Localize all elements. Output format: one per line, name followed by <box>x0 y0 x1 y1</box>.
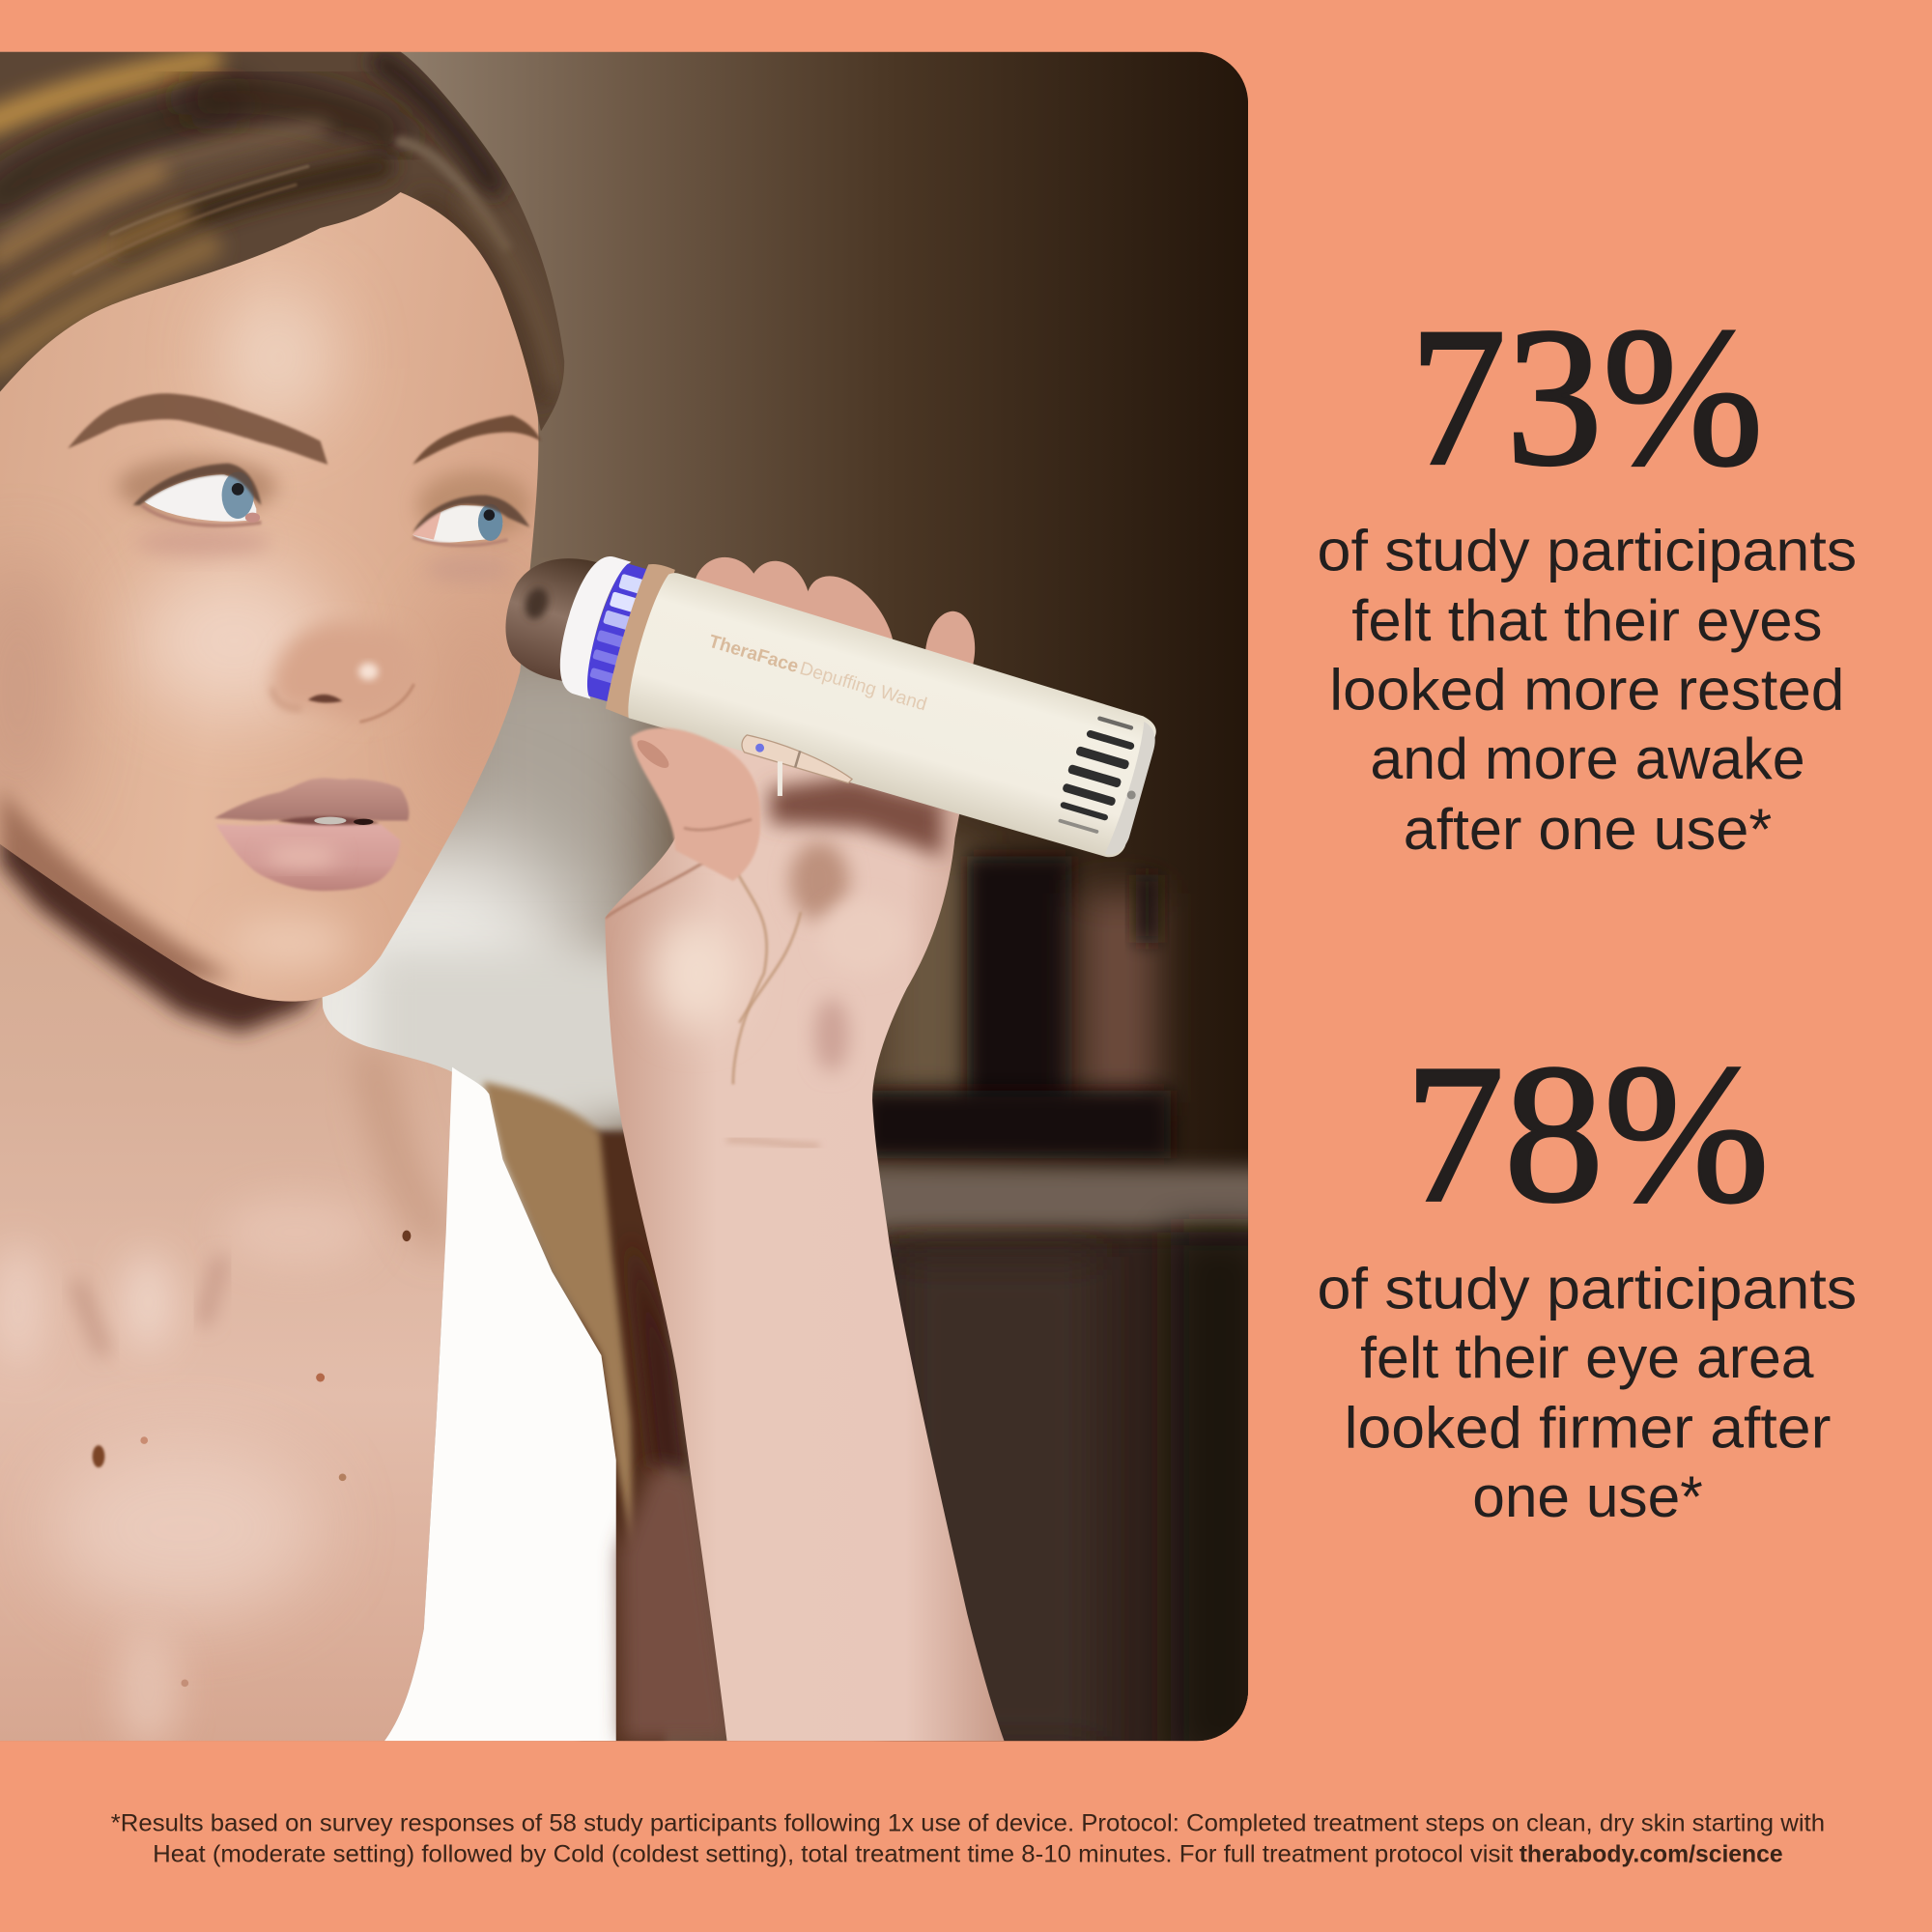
nose <box>272 622 417 722</box>
wand blue light strip <box>579 560 654 703</box>
right eye <box>412 496 529 546</box>
description: firmer eye area: looked firmer after <box>1345 1395 1831 1461</box>
heading: 78%: 78% <box>1405 1024 1770 1243</box>
description: firmer eye area <box>1318 1256 1857 1529</box>
wand end vent slots <box>1053 712 1140 837</box>
description: rested and awake: and more awake <box>1370 725 1805 791</box>
hair <box>0 52 564 431</box>
footnote: therabody.com/science <box>1520 1840 1783 1867</box>
description: firmer eye area: one use* <box>1472 1463 1703 1529</box>
description: firmer eye area: of study participants <box>1318 1256 1857 1321</box>
tan bag strap <box>483 1082 634 1552</box>
torso and neck skin <box>0 844 452 1741</box>
eye socket shading <box>117 457 277 516</box>
footnote: Heat (moderate setting) followed by Cold (coldest setting), total treatment time 8-10 minutes. For full treatment protocol visit <box>153 1840 1513 1867</box>
photo panel: woman using depuffing wand <box>0 52 1269 1762</box>
wand gold collar <box>602 560 675 719</box>
wand end cap <box>1105 722 1162 859</box>
fingers behind the wand <box>696 556 976 665</box>
wand treatment head <box>492 542 604 684</box>
wand printed label: TheraFaceDepuffing Wand <box>706 632 929 715</box>
blurred room background <box>0 52 1269 1762</box>
wand white ring <box>548 550 631 699</box>
face <box>0 173 541 1002</box>
left eye <box>133 464 261 526</box>
white tank top <box>384 1067 616 1741</box>
description: rested and awake: of study participants <box>1318 518 1857 583</box>
right eyebrow <box>412 415 541 465</box>
forearm and hand <box>591 727 1010 1749</box>
lips <box>214 778 409 891</box>
thumb in front of the wand <box>631 727 760 881</box>
description: rested and awake: looked more rested <box>1329 657 1844 723</box>
footnote <box>111 1809 1825 1867</box>
left eyebrow <box>68 393 327 465</box>
footnote: *Results based on survey responses of 58 study participants following 1x use of device. Protocol: Completed treatment steps on clean, dry skin starting with <box>111 1809 1825 1836</box>
description: rested and awake: felt that their eyes <box>1351 587 1822 653</box>
heading: 73%: 73% <box>1409 288 1763 507</box>
shaded underarm skin <box>620 1233 733 1741</box>
wand body <box>619 569 1163 864</box>
TheraFace wand device <box>488 526 1166 864</box>
description: firmer eye area: felt their eye area <box>1360 1324 1814 1390</box>
charging cable glint <box>778 761 782 796</box>
description: rested and awake <box>1318 518 1857 862</box>
wand buttons <box>740 733 856 783</box>
stat block: 73 percent <box>1318 288 1857 862</box>
stat block: 78 percent <box>1318 1024 1857 1529</box>
description: rested and awake: after one use* <box>1404 796 1772 862</box>
